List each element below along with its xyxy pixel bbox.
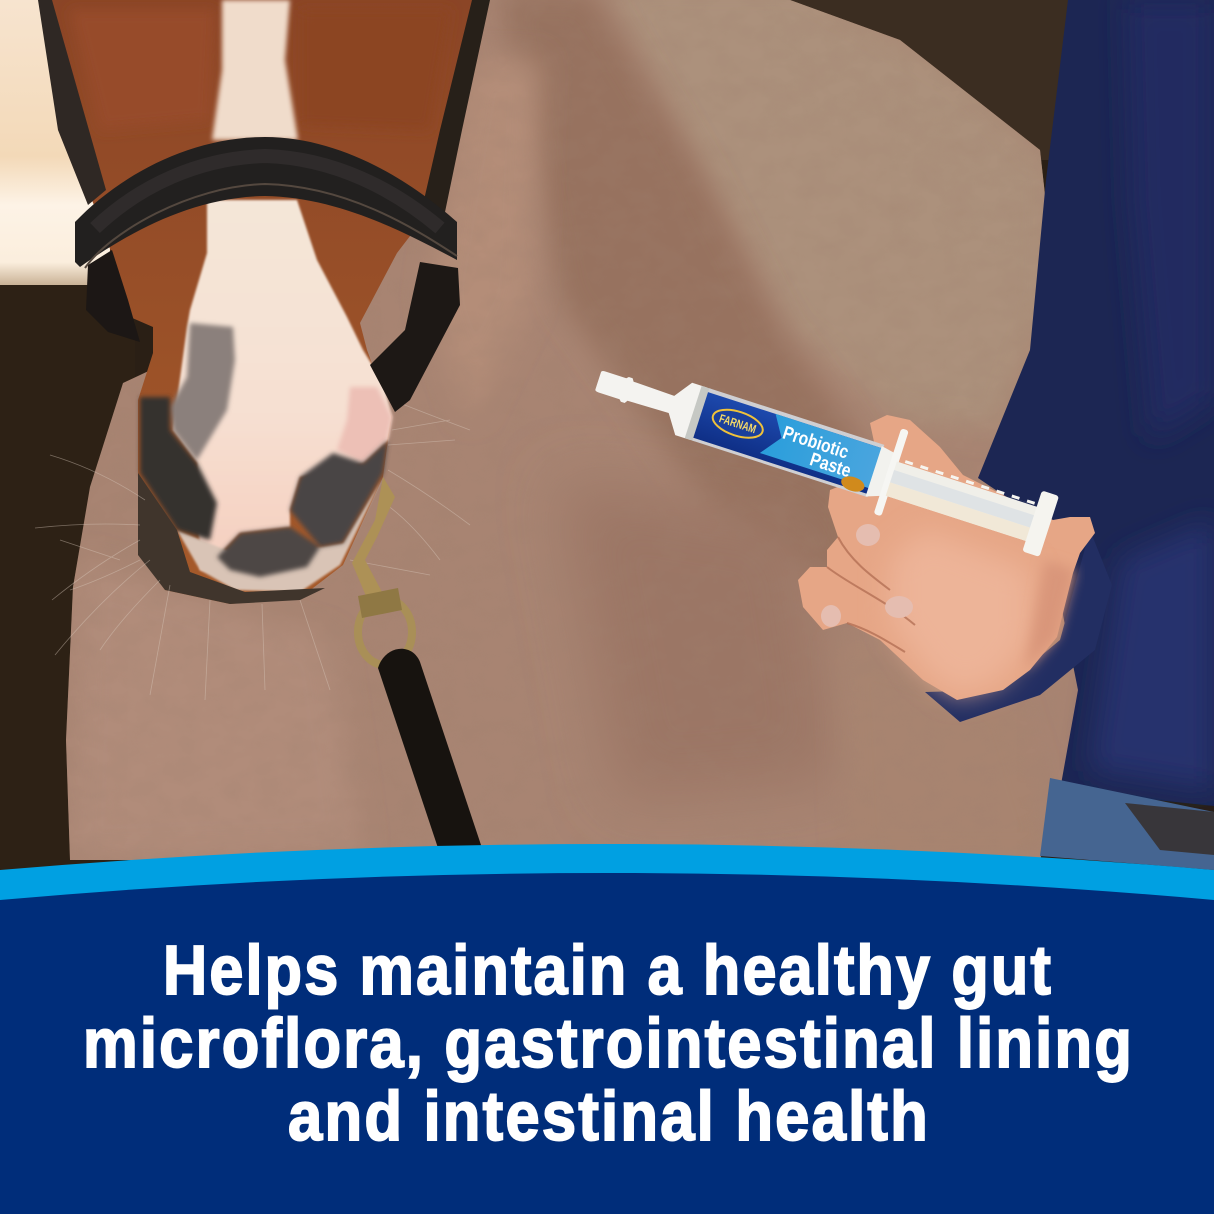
- blaze lower: [173, 200, 392, 582]
- left nostril: [140, 397, 217, 540]
- syringe label: Probiotic: [780, 423, 851, 464]
- banner: light blue curved band: [0, 844, 1214, 1214]
- banner: navy panel: [0, 873, 1214, 1214]
- right grey muzzle: [290, 440, 388, 547]
- grey patch: [170, 323, 235, 460]
- photo: horse head: [40, 0, 480, 604]
- syringe collar and flange: [866, 446, 897, 501]
- blaze upper: [212, 0, 298, 140]
- nose pink: [337, 387, 392, 463]
- photo: horse body: [60, 0, 1100, 870]
- cuff: [925, 530, 1112, 722]
- brand logo: FARNAM: [718, 411, 758, 436]
- headline text: Helps maintain a healthy gut: [163, 931, 1053, 1009]
- finger creases: [827, 537, 915, 652]
- syringe barrel band: [685, 386, 711, 441]
- photo: person torso in navy: [925, 0, 1214, 870]
- product: probiotic paste syringe: [585, 335, 1064, 566]
- lower lip: [138, 473, 325, 604]
- syringe label: [692, 388, 884, 497]
- headline text: [83, 931, 1134, 1155]
- syringe nozzle: [590, 355, 707, 440]
- syringe plunger: [882, 445, 1059, 557]
- photo: leather halter: [38, 0, 490, 412]
- whiskers: [35, 400, 470, 700]
- brand logo: [709, 404, 766, 443]
- photo: hand: [798, 415, 1095, 700]
- fingernails: [856, 524, 880, 546]
- muzzle shade: [177, 477, 383, 592]
- syringe label: Paste: [807, 449, 854, 482]
- gold seal: [839, 474, 866, 494]
- belt: [1125, 803, 1214, 855]
- photo: lead clip and rope: [352, 477, 482, 848]
- photo: stable background: [0, 0, 1214, 880]
- headline text: and intestinal health: [288, 1077, 930, 1155]
- lower grey muzzle: [217, 527, 320, 577]
- jeans: [1040, 778, 1214, 870]
